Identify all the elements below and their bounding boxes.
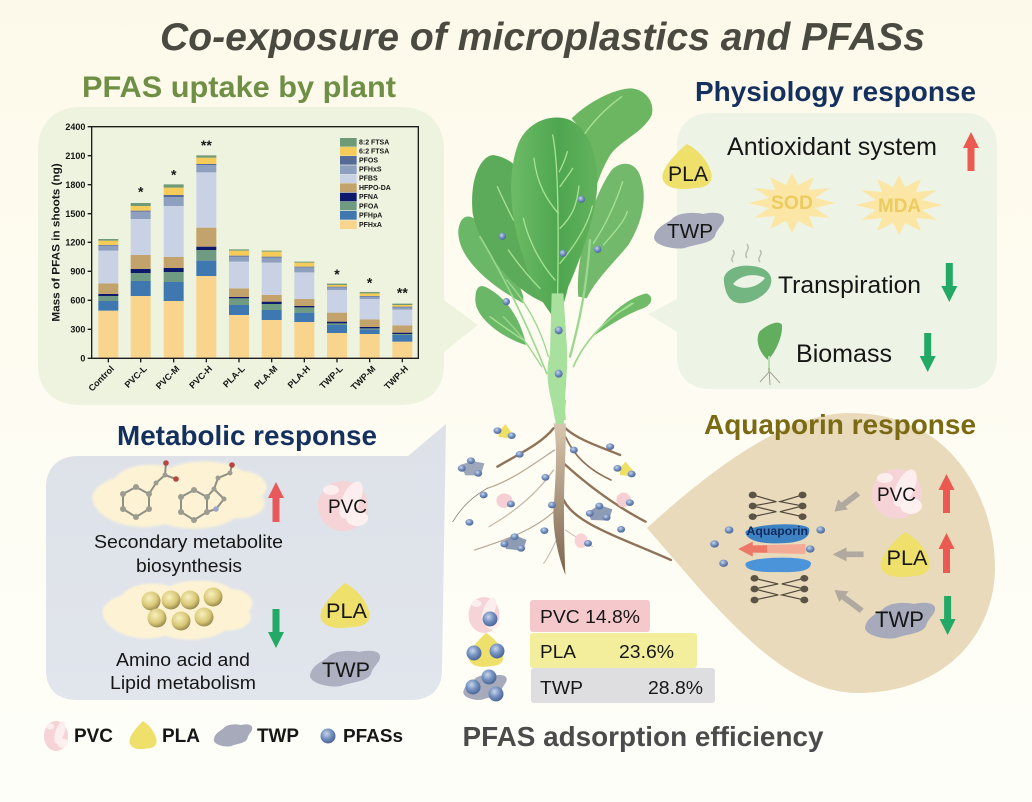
stem base [555, 400, 566, 424]
value: TWP: 28.8% [648, 677, 703, 698]
x axis labels: PVC-H [187, 364, 214, 391]
MDA burst: MDA [878, 196, 921, 217]
PVC row [468, 595, 650, 633]
stem [547, 293, 567, 420]
grey arrows [840, 493, 864, 611]
PFAS spheres on plant [499, 196, 601, 378]
cloud: amino acids and lipids [103, 581, 252, 640]
legend: PLA: PLA [162, 726, 200, 747]
y axis ticks: 2400 [65, 122, 85, 132]
molecule bonds [123, 463, 232, 520]
Aquaporin label: Aquaporin [746, 524, 808, 538]
icon: PVC with sphere [468, 595, 500, 633]
PVC label [318, 478, 368, 531]
aquaporin labels [865, 466, 956, 639]
panel: Metabolic response [46, 424, 446, 700]
PLA label [320, 583, 370, 628]
leaf: lower left [475, 286, 526, 345]
y axis ticks: 1200 [65, 238, 85, 248]
panel: Physiology response [648, 113, 997, 389]
panel: Aquaporin response [647, 413, 995, 693]
x axis labels [86, 363, 410, 393]
chart legend: 8:2 FTSA [359, 140, 389, 147]
x axis labels: TWP-M [349, 364, 377, 392]
arrow up [938, 474, 954, 513]
chart legend: 6:2 FTSA [359, 149, 389, 156]
arrow down [941, 263, 957, 302]
x axis labels: Control [86, 364, 116, 393]
Amino acid and Lipid metabolism [110, 649, 256, 693]
PVC label: PVC [328, 497, 367, 518]
value: PLA: 23.6% [619, 641, 674, 662]
leaf: far left [458, 217, 523, 303]
leaf: right [578, 164, 644, 298]
lipid bilayer [710, 492, 864, 611]
legend: TWP [214, 724, 299, 747]
y axis ticks: 900 [70, 267, 85, 277]
plant roots [453, 400, 671, 575]
Biomass: Biomass [796, 340, 892, 368]
TWP label: TWP [322, 657, 370, 682]
bar: TWP [531, 668, 715, 703]
chart legend: PFNA [359, 194, 378, 201]
arrow up [963, 132, 979, 171]
Transpiration: Transpiration [778, 272, 921, 299]
chart legend: PFHpA [359, 213, 382, 220]
arrow down [268, 609, 284, 648]
Amino acid and Lipid metabolism: Lipid metabolism [110, 672, 256, 693]
cloud: secondary metabolite molecules [92, 460, 266, 529]
Secondary metabolite biosynthesis: Secondary metabolite [94, 531, 283, 552]
metabolic contents [92, 460, 380, 693]
x axis labels: PLA-L [221, 363, 247, 389]
y axis ticks: 1500 [65, 209, 85, 219]
x axis labels: PVC-L [123, 363, 149, 390]
side roots [453, 428, 671, 563]
arrow up [938, 533, 954, 573]
chart legend: PFHxS [359, 167, 382, 174]
legend [44, 719, 403, 751]
significance stars: * [334, 266, 340, 282]
chart legend [340, 138, 391, 229]
petioles [480, 237, 632, 373]
significance stars [138, 137, 408, 301]
molecule atoms [120, 460, 235, 523]
TWP label [654, 213, 724, 249]
Secondary metabolite biosynthesis [94, 531, 283, 576]
SOD burst: SOD [771, 193, 813, 214]
PVC label [872, 466, 922, 519]
Secondary metabolite biosynthesis: biosynthesis [136, 555, 242, 576]
legend: PFASs: PFASs [343, 725, 403, 746]
chart legend: PFBS [359, 176, 378, 183]
heading: Metabolic response: Metabolic response [117, 420, 377, 451]
significance stars: * [367, 274, 373, 290]
main root [553, 423, 566, 575]
leaf: left back [472, 155, 553, 303]
veins [490, 97, 633, 340]
label: TWP: TWP [540, 677, 583, 698]
y axis ticks: 2100 [65, 151, 85, 161]
heading: Physiology response: Physiology response [695, 76, 976, 107]
water channel arrow [738, 542, 805, 557]
x axis labels: PLA-H [286, 364, 312, 390]
leaf: lower right [595, 293, 651, 335]
plant shoot [458, 88, 652, 420]
heading: Aquaporin response: Aquaporin response [704, 409, 976, 440]
PFAS spheres on roots [458, 427, 636, 552]
PVC label: PVC [877, 485, 916, 506]
MDA burst [855, 175, 943, 235]
PLA label [662, 144, 712, 189]
particle fragments [460, 424, 633, 551]
PLA row [466, 633, 697, 668]
y axis ticks: 600 [70, 296, 85, 306]
legend: PLA [129, 721, 200, 749]
aquaporin membrane diagram [710, 492, 864, 611]
chart legend: HFPO-DA [359, 185, 391, 192]
y axis ticks: 0 [80, 354, 85, 364]
Antioxidant system: Antioxidant system [727, 133, 937, 161]
PLA label [880, 532, 930, 577]
panel: PFAS uptake [38, 107, 478, 405]
arrow up [268, 482, 284, 522]
TWP label [310, 651, 380, 687]
Amino acid and Lipid metabolism: Amino acid and [116, 649, 250, 670]
adsorption efficiency chart [463, 595, 715, 703]
icon: small plant [758, 323, 782, 385]
legend: PVC: PVC [74, 726, 113, 747]
heading: PFAS adsorption efficiency: PFAS adsorption efficiency [462, 721, 824, 752]
PLA label: PLA [668, 163, 708, 186]
TWP label: TWP [875, 607, 924, 632]
y axis ticks [65, 122, 85, 364]
chart legend: PFHxA [359, 222, 382, 229]
arrow down [920, 333, 936, 372]
significance stars: * [138, 184, 144, 200]
icon: PLA with spheres [466, 633, 504, 667]
TWP label [865, 603, 935, 639]
bar: PLA [530, 633, 697, 668]
aquaporin protein [745, 524, 809, 543]
leaf: centre [511, 118, 597, 320]
TWP row [463, 668, 715, 703]
icon: TWP with spheres [463, 670, 507, 702]
TWP label: TWP [667, 220, 713, 243]
x axis labels: PLA-M [252, 364, 279, 391]
chart legend: PFOS [359, 158, 378, 165]
x axis labels: PVC-M [154, 364, 181, 391]
PLA label: PLA [886, 545, 928, 570]
SOD burst [748, 173, 836, 233]
significance stars: ** [397, 285, 408, 301]
significance stars: ** [201, 137, 212, 153]
chart axes [88, 127, 418, 362]
y axis title: Mass of PFAS in shoots (ng) [50, 163, 62, 322]
leaf: top right [572, 88, 652, 190]
chart bars [108, 155, 402, 358]
PLA label: PLA [326, 598, 368, 623]
x axis labels: TWP-L [318, 363, 345, 391]
label: PLA: PLA [540, 641, 577, 662]
PFAS spheres [725, 526, 733, 534]
chart legend: PFOA [359, 203, 378, 210]
y axis ticks: 300 [70, 325, 85, 335]
x axis labels: TWP-H [382, 364, 410, 392]
physiology contents [654, 132, 979, 385]
bar: PVC [530, 600, 650, 632]
value: PVC: PVC 14.8% [540, 606, 640, 627]
y axis ticks: 1800 [65, 180, 85, 190]
significance stars: * [171, 166, 177, 182]
icon: stoma [724, 244, 771, 303]
title: Co-exposure of microplastics and PFASs [160, 16, 925, 59]
legend: PVC [44, 719, 113, 751]
heading: PFAS uptake by plant: PFAS uptake by plant [82, 71, 396, 104]
legend: TWP: TWP [257, 726, 299, 747]
stacked bar chart [50, 122, 418, 393]
arrow down [940, 596, 956, 635]
